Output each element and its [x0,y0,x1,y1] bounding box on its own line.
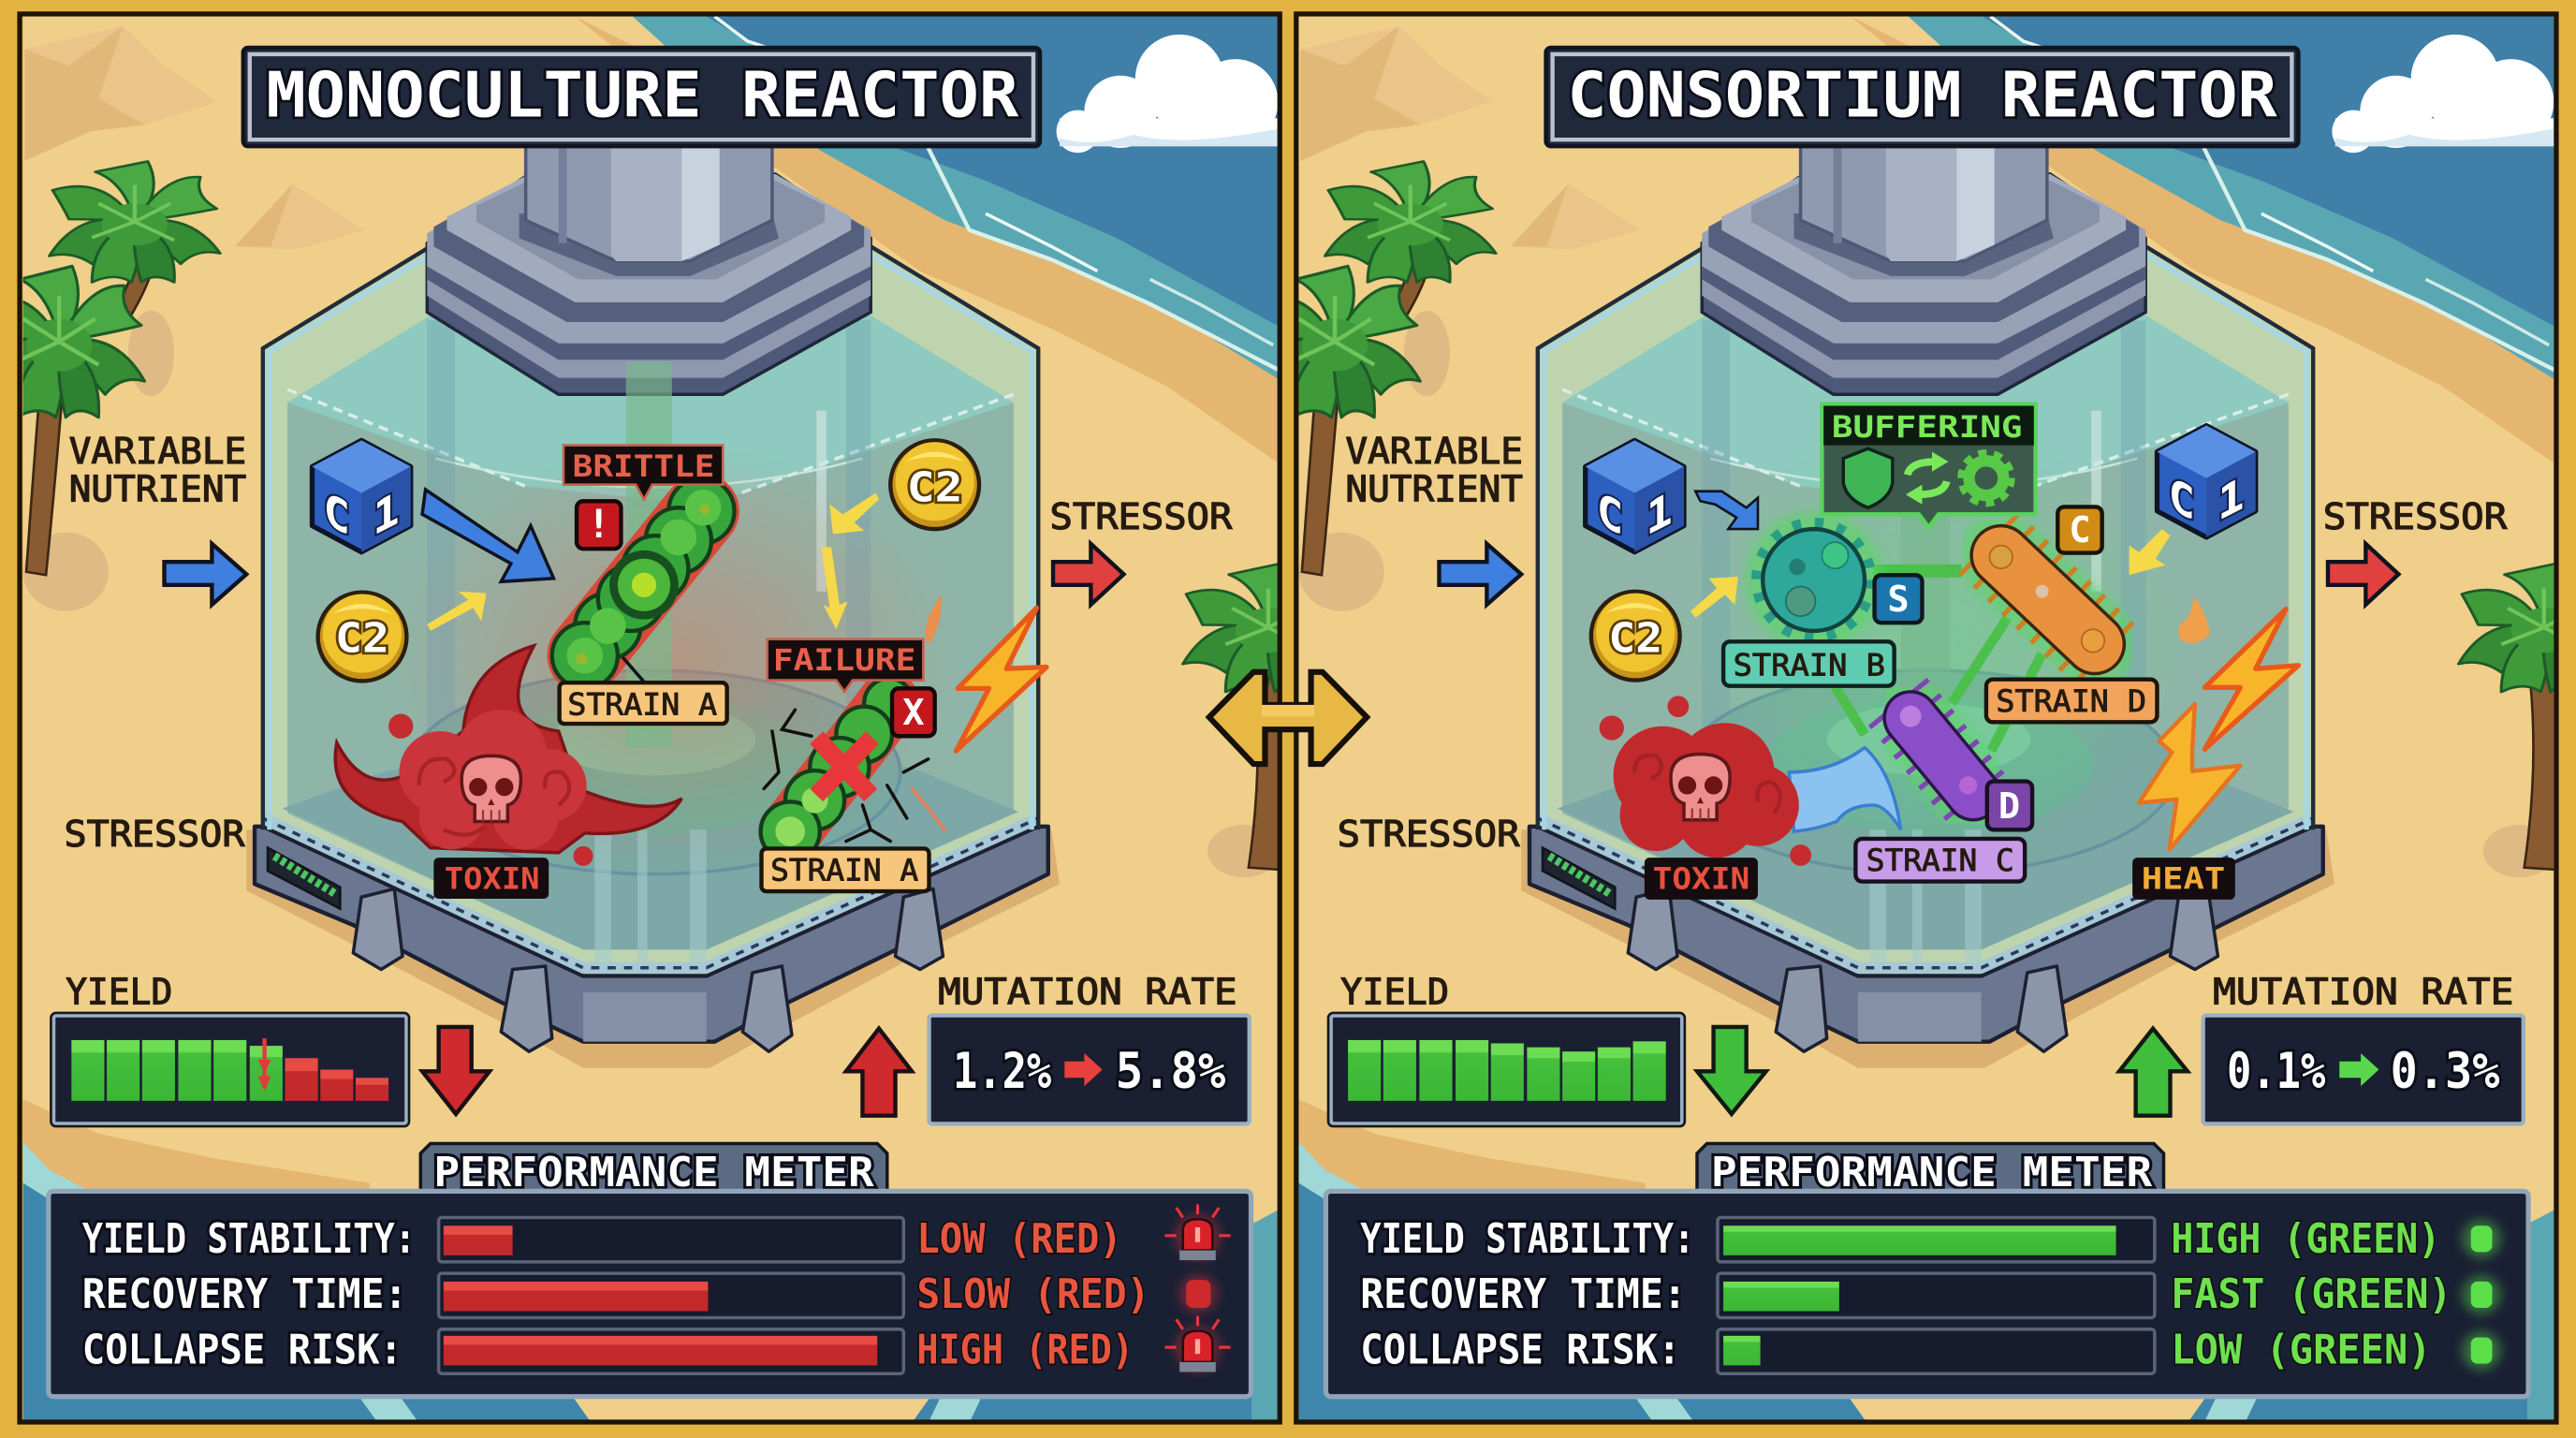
arrow: yield down [1697,1027,1766,1114]
red stress glow [386,444,961,871]
row: recovery time: FAST (GREEN) [2171,1270,2452,1318]
label: strain A upper: STRAIN A [567,686,717,722]
nutrient cube C1: C [324,481,350,547]
icon: flame [2178,596,2210,643]
central green column [626,361,672,748]
label: stressor right: STRESSOR [2323,496,2508,538]
panel: consortium beach backdrop [1250,0,2576,1438]
reactor title [243,48,1040,146]
yellow flow arrows [1690,529,2170,618]
arrow: nutrient input [165,544,246,605]
mutation value panel: 5.8% [1116,1043,1226,1100]
flame sparks [925,594,942,644]
nutrient cube C1: 1 [373,481,400,547]
strain A brittle cell [552,478,735,688]
label: mutation rate: MUTATION RATE [2213,971,2513,1013]
badge: exclamation [577,501,621,549]
callout: brittle: BRITTLE [573,448,714,484]
toxin cloud [335,646,681,866]
mutation value panel: 0.1% [2227,1043,2326,1100]
label: variable nutrient [1345,431,1523,510]
double-headed comparison arrow [1209,672,1367,764]
label: stressor left: STRESSOR [64,814,245,856]
label: stressor left: STRESSOR [1338,814,1520,856]
left mutation gauge [846,971,1250,1123]
panel: monoculture beach backdrop [0,0,1354,1438]
strain B cell [1745,511,1882,649]
icon: shield [1843,448,1893,507]
icon: lightning upper [2204,609,2298,749]
label: stressor right: STRESSOR [1050,496,1233,538]
reactor vessel [246,144,1060,1068]
label: strain A lower: STRAIN A [770,853,918,888]
row: collapse risk [82,1316,1231,1374]
coin C2: C2 [1608,615,1662,663]
meter tab: PERFORMANCE METER [433,1149,874,1196]
strain C cell [1897,701,1984,808]
coin C2 right: C2 [907,463,962,511]
row: recovery time [1360,1270,2501,1318]
yield bar panel [1328,1013,1685,1126]
row: yield stability: YIELD STABILITY: [1360,1215,1694,1263]
coin C2 left [318,593,406,681]
panel: left performance meter [49,1143,1251,1397]
right mutation gauge [2119,971,2524,1123]
label: yield: YIELD [66,971,172,1013]
arrow: stressor [1053,544,1123,605]
row: recovery time: RECOVERY TIME: [1360,1270,1687,1318]
badge: failure X: X [902,692,924,734]
row: yield stability: YIELD STABILITY: [82,1215,416,1263]
nutrient cube C1 right [2157,426,2256,537]
badge S [1875,575,1922,623]
coin C2 right [890,440,979,529]
row: yield stability [1360,1215,2501,1263]
badge C: C [2069,509,2091,551]
left yield gauge [51,971,490,1126]
row: collapse risk: LOW (GREEN) [2171,1327,2432,1374]
badge D: D [1998,785,2020,828]
label: toxin: TOXIN [1653,860,1749,896]
arrow: C1 flow to strain [422,490,553,581]
badge S: S [1887,579,1910,621]
connection lines between strains [1835,571,2042,751]
reactor title [1546,48,2298,146]
callout: failure: FAILURE [773,642,915,678]
reactor title: CONSORTIUM REACTOR [1567,59,2277,132]
row: recovery time [82,1270,1218,1318]
strain D cell [1988,542,2108,657]
row: yield stability: LOW (RED) [916,1215,1122,1263]
label: strain B [1723,641,1895,686]
badge D [1987,782,2032,829]
nutrient cube C1 left: C [1597,481,1623,547]
strain A failed cell [761,679,944,861]
coin C2 left: C2 [335,615,389,663]
label: variable nutrient [69,431,246,510]
label: strain C: STRAIN C [1866,843,2014,878]
arrow: C1 to strain B [1695,492,1758,529]
row: recovery time: RECOVERY TIME: [82,1270,407,1318]
row: collapse risk: HIGH (RED) [916,1327,1134,1374]
callout: brittle [564,446,723,500]
nutrient cube C1 [312,440,411,552]
badge C [2057,506,2102,553]
nutrient cube C1 right: C [2169,466,2195,532]
green buffering glow [1660,427,2202,855]
mutation value panel [2203,1016,2524,1123]
right yield gauge [1328,971,1766,1126]
arrow: mutation up [846,1029,912,1116]
callout: buffering: BUFFERING [1832,409,2023,445]
row: collapse risk [1360,1327,2501,1374]
callout: failure [768,639,923,692]
reactor title: MONOCULTURE REACTOR [266,59,1019,132]
label: toxin [433,858,549,899]
badge: failure X [892,688,935,736]
arrow: stressor [2328,544,2398,605]
arrow: mutation up [2119,1029,2188,1116]
yield bar panel [51,1013,409,1126]
row: collapse risk: COLLAPSE RISK: [82,1327,402,1374]
blue wave buffer [1789,748,1901,831]
panel: monoculture reactor [64,48,1233,1068]
label: variable nutrient: VARIABLE [1345,431,1523,473]
label: mutation rate: MUTATION RATE [938,971,1237,1013]
label: yield: YIELD [1340,971,1449,1013]
central speckled column [1901,509,1950,740]
label: toxin: TOXIN [445,860,540,896]
row: recovery time: SLOW (RED) [916,1270,1150,1318]
toxin cloud [1600,696,1811,866]
nutrient cube C1 left: 1 [1646,481,1673,547]
label: variable nutrient: NUTRIENT [69,468,246,510]
row: yield stability: HIGH (GREEN) [2171,1215,2440,1263]
label: variable nutrient: NUTRIENT [1345,468,1523,510]
label: strain D: STRAIN D [1996,683,2146,719]
coin C2 [1591,592,1680,681]
icon: swap arrows [1906,452,1949,505]
label: toxin [1645,858,1758,900]
label: strain A upper [560,657,727,724]
callout: buffering [1822,404,2036,527]
arrow: yield down [422,1027,490,1114]
panel: right performance meter [1325,1143,2528,1397]
panel: consortium reactor [1338,48,2508,1068]
mutation value panel: 1.2% [953,1043,1052,1100]
nutrient cube C1 left [1586,440,1684,552]
reactor vessel [1521,144,2334,1068]
label: heat [2132,858,2235,900]
label: heat: HEAT [2142,860,2225,896]
arrow: nutrient input [1439,544,1521,605]
row: yield stability [82,1204,1231,1263]
meter body [49,1191,1251,1397]
nutrient cube C1 right: 1 [2217,466,2245,532]
mutation value panel [929,1016,1250,1123]
meter body [1325,1191,2528,1397]
label: variable nutrient: VARIABLE [69,431,246,473]
yellow flow arrows [427,493,879,631]
icon: lightning [956,608,1046,751]
badge: exclamation: ! [587,501,610,547]
label: strain B: STRAIN B [1734,647,1885,682]
mutation value panel: 0.3% [2391,1043,2500,1100]
icon: lightning lower [2139,704,2240,849]
meter tab: PERFORMANCE METER [1711,1149,2153,1196]
row: collapse risk: COLLAPSE RISK: [1360,1327,1680,1374]
icon: gear [1962,453,2011,503]
